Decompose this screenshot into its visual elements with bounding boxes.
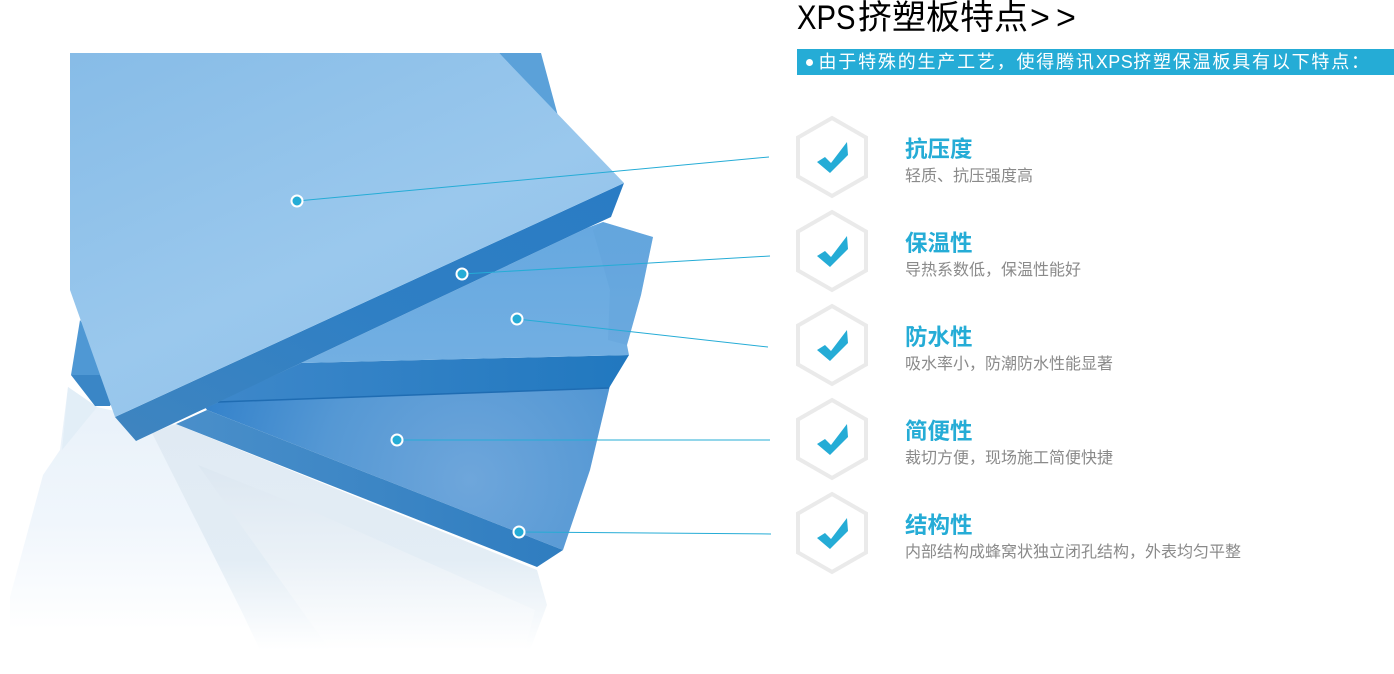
reflection under boards <box>10 387 547 650</box>
callout line 2 <box>456 256 770 280</box>
banner: 由于特殊的生产工艺，使得腾讯XPS挤塑保温板具有以下特点： <box>818 52 1371 72</box>
feature 5 <box>905 513 1241 561</box>
feature 1 <box>905 137 1033 185</box>
callout line 5 <box>514 526 771 538</box>
board: back left corner <box>71 320 125 406</box>
callout line 1 <box>292 157 769 206</box>
feature 3: 防水性 <box>905 325 973 350</box>
icon: hexagon check 5 <box>798 494 866 572</box>
feature 3: 吸水率小，防潮防水性能显著 <box>905 356 1113 373</box>
feature 4 <box>905 419 1113 467</box>
icon: hexagon check 3 <box>798 306 866 384</box>
feature 1: 轻质、抗压强度高 <box>905 168 1033 185</box>
feature 2: 保温性 <box>905 231 973 256</box>
feature 1: 抗压度 <box>905 137 973 162</box>
board: bottom <box>176 375 612 567</box>
title: > <box>1056 0 1076 37</box>
feature 4: 简便性 <box>905 419 973 444</box>
title: XPS <box>797 0 856 37</box>
feature 4: 裁切方便，现场施工简便快捷 <box>905 450 1113 467</box>
title: > <box>1030 0 1050 37</box>
feature 5: 内部结构成蜂窝状独立闭孔结构，外表均匀平整 <box>905 544 1241 561</box>
icon: hexagon check 1 <box>798 118 866 196</box>
feature 5: 结构性 <box>905 513 973 538</box>
title: 挤塑板特点 <box>858 0 1028 37</box>
feature 2: 导热系数低，保温性能好 <box>905 262 1081 279</box>
feature 3 <box>905 325 1113 373</box>
title <box>797 0 1076 37</box>
feature 2 <box>905 231 1081 279</box>
callout line 3 <box>512 314 768 347</box>
board: top <box>70 53 624 441</box>
board: back right sliver <box>499 53 558 116</box>
icon: hexagon check 4 <box>798 400 866 478</box>
board: middle <box>178 222 653 420</box>
callout line 4 <box>392 434 770 446</box>
icon: hexagon check 2 <box>798 212 866 290</box>
